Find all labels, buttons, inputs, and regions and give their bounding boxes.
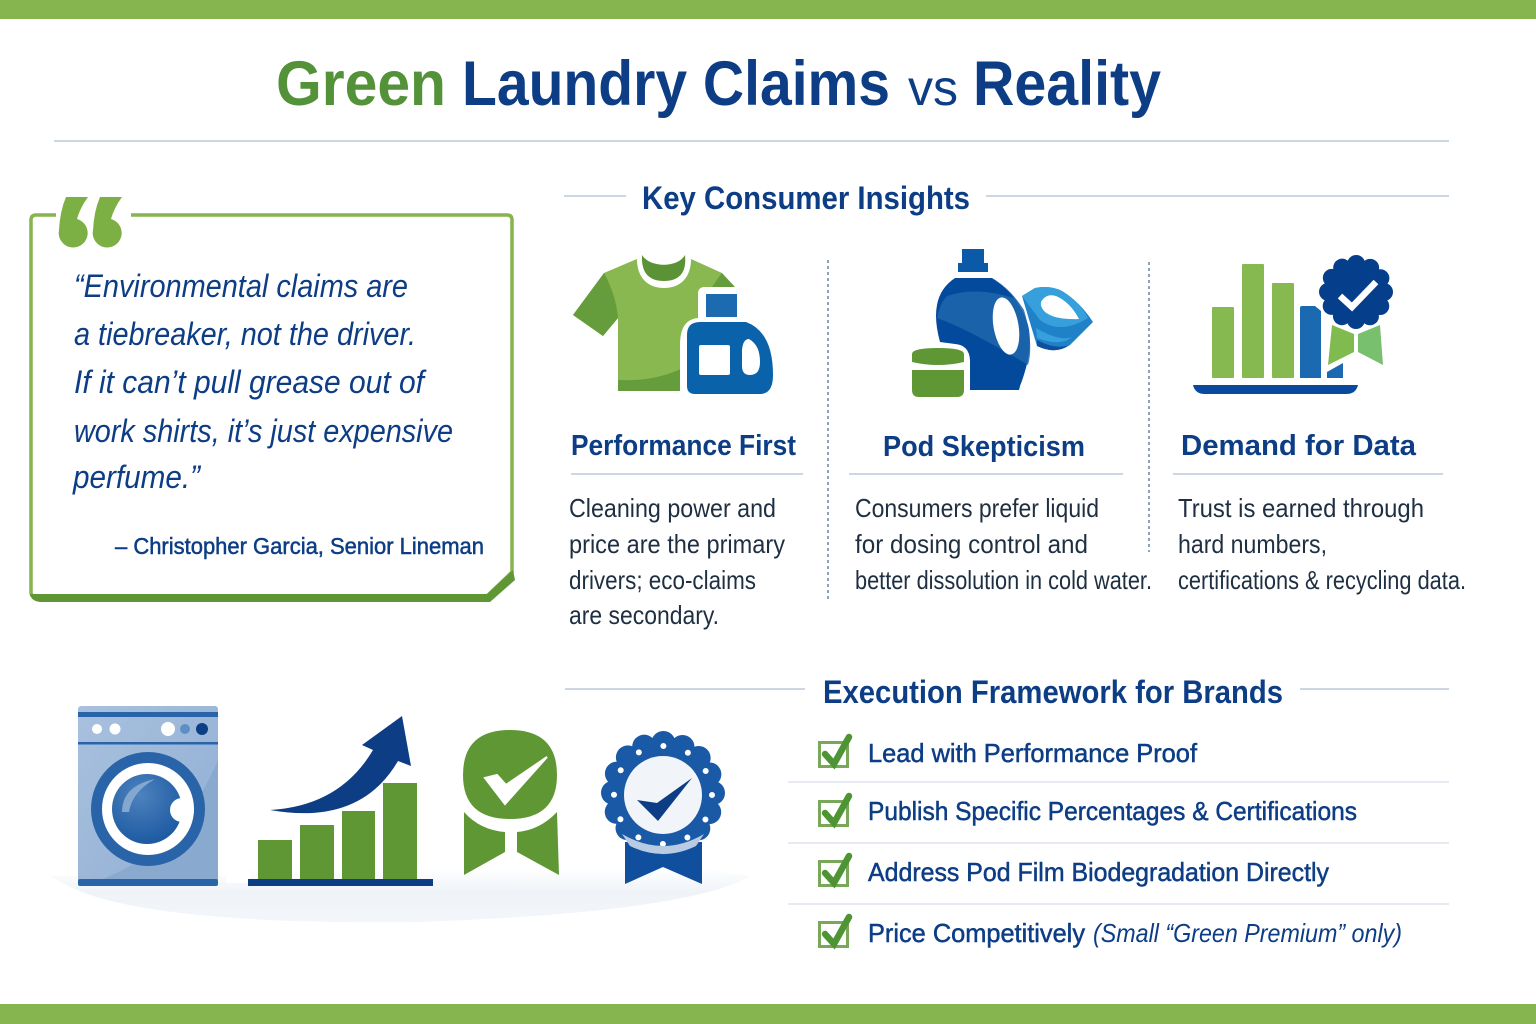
icon: washing machine — [78, 706, 218, 886]
icon: quotation marks — [59, 197, 122, 247]
quote text — [72, 268, 453, 495]
illustration: washer, chart and badges — [50, 706, 750, 922]
text: demand for data body: certifications & recycling data. — [1178, 565, 1466, 595]
heading: key consumer insights: Key Consumer Insights — [642, 180, 970, 216]
column divider 2 — [1148, 262, 1150, 552]
icon: bottle, pod and cap — [912, 249, 1093, 397]
title — [276, 49, 1161, 119]
quote text: perfume.” — [72, 459, 201, 495]
heading: execution framework for brands: Execution Framework for Brands — [823, 674, 1283, 710]
quote box frame — [31, 215, 512, 597]
text: performance first body: price are the primary — [569, 529, 785, 559]
icon: green check badge — [463, 730, 559, 875]
text: performance first body: drivers; eco-claims — [569, 565, 756, 595]
text: performance first body: Cleaning power and — [569, 493, 776, 523]
heading: demand for data: Demand for Data — [1181, 430, 1417, 462]
icon: t-shirt and detergent bottle — [573, 255, 780, 400]
top green band — [0, 0, 1536, 19]
heading: pod skepticism: Pod Skepticism — [883, 431, 1085, 463]
heading: performance first: Performance First — [571, 430, 796, 462]
icon: blue rosette badge — [609, 739, 717, 884]
text: performance first body: are secondary. — [569, 600, 719, 630]
icon: rising bar chart with arrow — [248, 716, 433, 886]
item: address pod film biodegradation directly: Address Pod Film Biodegradation Directly — [868, 857, 1329, 887]
quote box bottom edge and fold — [30, 570, 515, 602]
item: price competitively: Price Competitively — [868, 918, 1085, 948]
text: performance first body — [569, 493, 785, 630]
quote text: work shirts, it’s just expensive — [74, 413, 453, 449]
bottom green band — [0, 1004, 1536, 1024]
title: vs — [908, 60, 958, 116]
item: lead with performance proof: Lead with Performance Proof — [868, 738, 1198, 768]
item: price competitively: (Small “Green Premium” only) — [1093, 918, 1402, 948]
text: pod skepticism body — [855, 493, 1152, 595]
quote text: a tiebreaker, not the driver. — [74, 316, 416, 352]
panel: demand for data — [1173, 262, 1466, 595]
item: price competitively — [820, 917, 1402, 948]
text: demand for data body — [1178, 493, 1466, 595]
item: publish specific percentages and certifications: Publish Specific Percentages & Certifications — [868, 796, 1357, 826]
quote text: “Environmental claims are — [74, 268, 408, 304]
icon: bar chart with rosette — [1193, 262, 1386, 394]
title: Green — [276, 49, 446, 119]
text: demand for data body: Trust is earned through — [1178, 493, 1424, 523]
title: Reality — [973, 49, 1161, 119]
text: pod skepticism body: for dosing control and — [855, 529, 1088, 559]
text: demand for data body: hard numbers, — [1178, 529, 1327, 559]
text: pod skepticism body: better dissolution in cold water. — [855, 565, 1152, 595]
panel: performance first — [569, 255, 803, 630]
panel: pod skepticism — [849, 249, 1152, 595]
column divider 1 — [827, 260, 829, 600]
checklist — [788, 737, 1449, 948]
panel: quote — [30, 197, 515, 602]
quote attribution: – Christopher Garcia, Senior Lineman — [115, 533, 484, 559]
title: Laundry Claims — [462, 49, 890, 119]
quote text: If it can’t pull grease out of — [74, 364, 427, 400]
floor shadow — [50, 868, 750, 922]
text: pod skepticism body: Consumers prefer liquid — [855, 493, 1099, 523]
